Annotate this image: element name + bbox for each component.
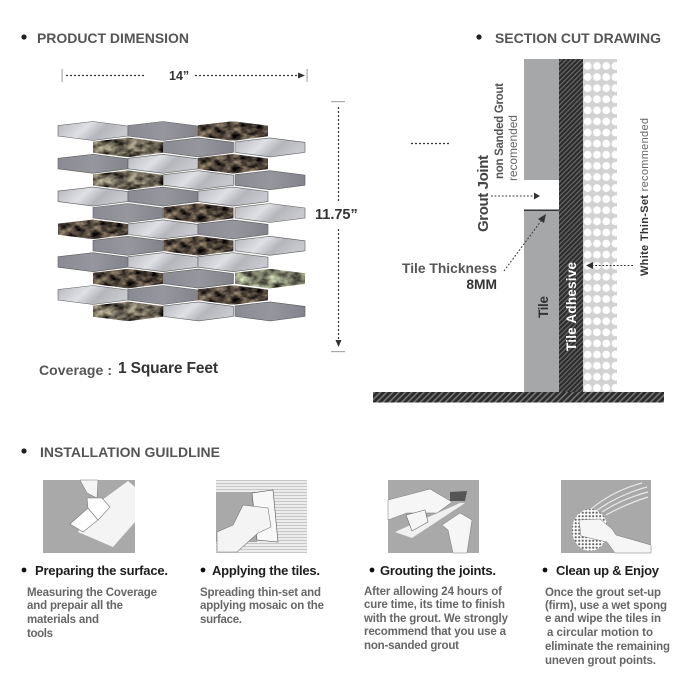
- step 2: applying the tiles: Applying the tiles.: [212, 563, 320, 578]
- step 3: grouting the joints: recommend that you use a: [364, 626, 507, 638]
- icon: grouting joints: [388, 480, 479, 553]
- step 1: preparing the surface: and prepair all the: [27, 600, 123, 612]
- step 1: preparing the surface: Preparing the surface.: [35, 563, 168, 578]
- step 4: clean up and enjoy: a circular motion to: [547, 627, 653, 639]
- step 3: grouting the joints: cure time, its time to finish: [364, 599, 505, 611]
- step 2: applying the tiles: surface.: [200, 614, 242, 626]
- arrow: thin-set: [586, 262, 633, 269]
- step 1: preparing the surface: Measuring the Coverage: [27, 587, 157, 599]
- short dotted leader: [411, 142, 449, 144]
- lower tile: [524, 210, 559, 392]
- dimension: width 14 inches: [62, 69, 308, 83]
- label: tile adhesive: Tile Adhesive: [564, 262, 579, 351]
- dimension: height 11.75 inches: 11.75”: [315, 207, 358, 223]
- heading: product dimension: PRODUCT DIMENSION: [37, 30, 189, 46]
- heading: section cut drawing: SECTION CUT DRAWING: [495, 30, 661, 46]
- step 4: clean up and enjoy: Once the grout set-up: [545, 587, 661, 599]
- label: non sanded grout: non Sanded Grout: [494, 83, 506, 179]
- step 3: grouting the joints: Grouting the joints.: [380, 563, 496, 578]
- label: tile: Tile: [536, 296, 551, 318]
- step 3: grouting the joints: non-sanded grout: [364, 640, 459, 652]
- mosaic tile sheet: [58, 122, 305, 321]
- arrow: tile thickness: [504, 214, 546, 271]
- step 4: clean up and enjoy: eliminate the remaining: [545, 641, 670, 653]
- icon: spreading with trowel: [216, 480, 307, 553]
- coverage label: [39, 360, 218, 378]
- dimension: width 14 inches: 14”: [169, 69, 189, 83]
- step 1: preparing the surface: [22, 563, 168, 640]
- ground slab: [373, 392, 664, 402]
- icon: sponge cleanup: [561, 480, 651, 553]
- section drawing: [373, 59, 664, 402]
- step 2: applying the tiles: Spreading thin-set and: [200, 587, 321, 599]
- icon: rolling out sheet: [43, 480, 135, 553]
- label: tile thickness: Tile Thickness: [402, 261, 497, 276]
- label: grout joint: Grout Joint: [475, 155, 492, 232]
- step 1: preparing the surface: tools: [27, 628, 53, 640]
- step 3: grouting the joints: [363, 563, 509, 652]
- step 3: grouting the joints: After allowing 24 hours of: [364, 586, 502, 598]
- heading: installation guideline: INSTALLATION GUILDLINE: [40, 444, 220, 460]
- upper tile: [524, 59, 559, 180]
- arrow: grout joint: [491, 192, 540, 200]
- step 4: clean up and enjoy: (firm), use a wet spong: [545, 600, 667, 612]
- step 4: clean up and enjoy: [543, 563, 670, 667]
- step 4: clean up and enjoy: e and wipe the tiles in: [545, 613, 661, 625]
- step 2: applying the tiles: [200, 563, 324, 626]
- label: tile thickness: 8MM: [466, 277, 497, 292]
- step 3: grouting the joints: with the grout. We strongly: [363, 613, 509, 625]
- label: white thin-set recommended: White Thin-Set recommended: [639, 118, 651, 276]
- coverage label: 1 Square Feet: [118, 360, 218, 377]
- step 1: preparing the surface: materials and: [27, 614, 99, 626]
- label: tile thickness: [402, 261, 497, 292]
- wall dot layer: [583, 59, 617, 392]
- adhesive layer: [559, 59, 583, 392]
- label: recomended: recomended: [506, 115, 520, 181]
- step 4: clean up and enjoy: uneven grout points.: [545, 655, 656, 667]
- coverage label: Coverage :: [39, 362, 112, 378]
- tile top edge: [524, 210, 559, 211]
- step 2: applying the tiles: applying mosaic on the: [200, 600, 324, 612]
- dimension: height 11.75 inches: [315, 101, 358, 352]
- step 4: clean up and enjoy: Clean up & Enjoy: [556, 563, 660, 578]
